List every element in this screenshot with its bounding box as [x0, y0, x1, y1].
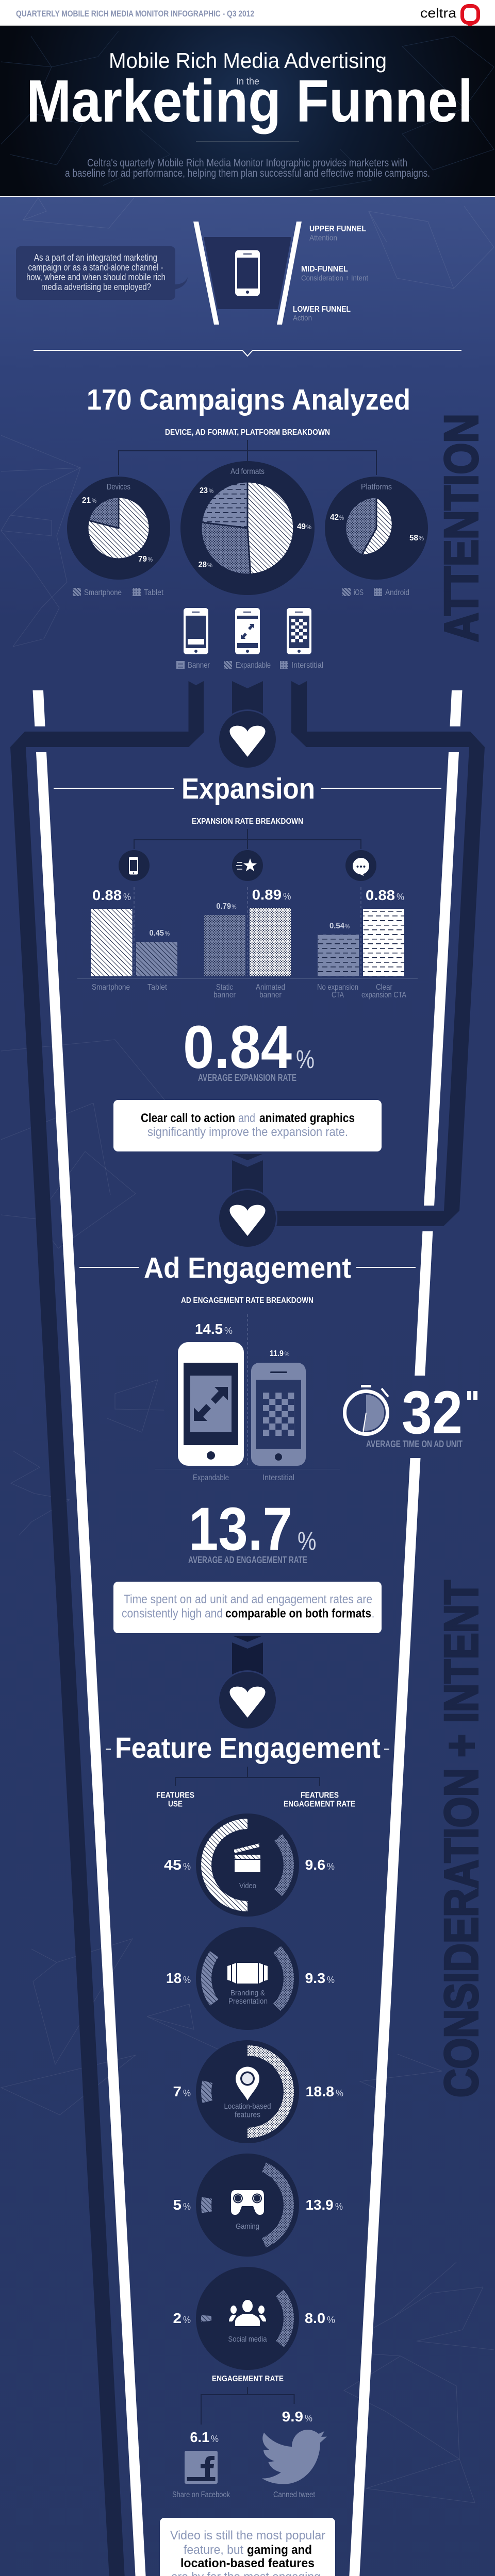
pie chart: ad formats: 28 [198, 561, 207, 569]
pie chart: ad formats: 23 [200, 486, 208, 495]
arrow: to ad engagement [232, 1154, 263, 1193]
callout: ad engagement takeaway [113, 1582, 382, 1633]
feature: branding and presentation: 18 [166, 1970, 182, 1986]
callout: intro question [16, 246, 188, 300]
callout: intro question: media advertising be employed? [41, 282, 151, 292]
feature: video [164, 1814, 335, 1917]
legend: ad formats: Expandable [236, 661, 271, 670]
stat: average ad engagement rate: AVERAGE AD ENGAGEMENT RATE [188, 1555, 307, 1565]
feature: social media [173, 2267, 335, 2370]
bar chart: expansion rate: % [345, 923, 350, 930]
icon: people [229, 2300, 266, 2326]
feature: location-based: % [183, 2088, 191, 2098]
connector lines [175, 1767, 320, 1786]
header bar: QUARTERLY MOBILE RICH MEDIA MONITOR INFOGRAPHIC - Q3 2012 [16, 9, 254, 19]
feature: gaming: Gaming [236, 2222, 259, 2231]
callout: feature takeaway: gaming and [247, 2543, 312, 2557]
column headers [156, 1791, 355, 1808]
feature: video: % [327, 1861, 335, 1872]
funnel pipe: right [268, 681, 485, 1226]
callout: expansion takeaway [113, 1100, 382, 1151]
stat: average expansion rate: AVERAGE EXPANSION RATE [198, 1073, 296, 1083]
icon: heart 2 [219, 1189, 276, 1248]
canned tweet: Canned tweet [273, 2490, 315, 2499]
connector lines [134, 829, 361, 849]
bar chart: expansion rate: 0.88 [92, 887, 122, 903]
legend: ad formats: Banner [188, 661, 210, 670]
bar chart: expansion rate: 0.54 [329, 922, 344, 930]
callout: ad engagement takeaway: consistently high and [122, 1606, 223, 1621]
stat: average expansion rate: % [296, 1045, 315, 1074]
callout: ad engagement takeaway: Time spent on ad unit and ad engagement rates are [124, 1592, 372, 1606]
funnel stage labels [293, 225, 369, 323]
hero panel: In the [236, 76, 259, 87]
icon: device [119, 850, 150, 881]
canned tweet: 9.9 [282, 2409, 303, 2425]
feature: gaming: % [183, 2201, 191, 2212]
callout: intro question: campaign or as a stand-alone channel - [28, 262, 163, 273]
funnel stage labels: LOWER FUNNEL [293, 305, 351, 314]
callout: intro question: how, where and when should mobile rich [26, 272, 166, 282]
feature: social media: % [327, 2315, 335, 2325]
feature: video: Video [239, 1882, 256, 1890]
callout: feature takeaway: Video is still the most popular [170, 2529, 325, 2543]
bar chart: expansion rate: Clear [376, 983, 393, 992]
callout: expansion takeaway: Clear call to action [141, 1111, 235, 1125]
feature: social media: Social media [228, 2335, 267, 2344]
feature: video: % [183, 1861, 191, 1872]
feature: location-based: Location-based [224, 2102, 271, 2111]
hero panel: Celtra's quarterly Mobile Rich Media Monitor Infographic provides marketers with [87, 157, 407, 169]
feature: location-based: features [235, 2110, 260, 2120]
column headers: ENGAGEMENT RATE [284, 1800, 355, 1808]
pie chart: devices: Devices [107, 483, 130, 492]
bar chart: expansion rate: 0.89 [252, 887, 282, 903]
pie chart: devices: % [92, 497, 96, 504]
phone chart: ad engagement [155, 1314, 340, 1482]
column headers: FEATURES [301, 1791, 339, 1800]
feature: gaming: 5 [173, 2197, 182, 2213]
pie chart: ad formats: % [207, 562, 212, 569]
heading: feature engagement: Feature Engagement [115, 1732, 381, 1765]
icon: clapperboard [234, 1843, 260, 1872]
feature: social media: 8.0 [305, 2310, 325, 2326]
heading: ad engagement: Ad Engagement [144, 1251, 351, 1284]
bar chart: expansion rate: banner [213, 991, 236, 999]
pie chart: platforms: % [419, 535, 424, 542]
feature: gaming: % [335, 2201, 343, 2212]
icon: twitter bird [262, 2430, 327, 2484]
bar chart: expansion rate: % [283, 891, 291, 902]
pie chart: ad formats: 49 [297, 522, 306, 531]
stat: average ad engagement rate: % [298, 1527, 317, 1555]
pie chart: devices: 21 [82, 496, 91, 505]
bar chart: expansion rate: % [397, 892, 404, 902]
legend: platforms [342, 588, 409, 597]
icon: map pin [236, 2067, 259, 2100]
subheading: engagement rate: ENGAGEMENT RATE [212, 2375, 284, 2383]
connector lines [201, 2387, 294, 2425]
bar chart: expansion rate: % [123, 892, 131, 902]
icon: expandable phone [235, 608, 260, 654]
legend: platforms: iOS [354, 588, 364, 597]
bar chart: expansion rate: % [232, 903, 237, 910]
column headers: USE [168, 1800, 183, 1808]
subheading: breakdown: DEVICE, AD FORMAT, PLATFORM BREAKDOWN [165, 428, 330, 437]
stat: average expansion rate: 0.84 [183, 1013, 292, 1081]
share on facebook: % [211, 2434, 219, 2444]
funnel stage labels: MID-FUNNEL [301, 265, 348, 274]
callout: feature takeaway: feature, but [184, 2543, 243, 2557]
heading: expansion: Expansion [182, 772, 315, 805]
hero panel [0, 26, 495, 197]
icon: interstitial phone [287, 608, 311, 654]
funnel pipe: left [10, 681, 227, 2576]
feature: branding and presentation: Presentation [228, 1997, 268, 2006]
phone chart: ad engagement: % [285, 1350, 290, 1358]
phone chart: ad engagement: Expandable [193, 1473, 229, 1482]
icon: star [232, 850, 263, 881]
pie chart: ad formats: % [306, 523, 311, 531]
section divider [34, 350, 461, 356]
callout: expansion takeaway: and [238, 1111, 255, 1125]
bar chart: expansion rate: No expansion [317, 983, 358, 992]
icon: interstitial phone large [251, 1363, 306, 1466]
bar chart: expansion rate: banner [259, 991, 282, 999]
stat: average time on ad unit: 32 [402, 1379, 463, 1447]
feature: branding and presentation: Branding & [230, 1989, 265, 1997]
bar chart: expansion rate: 0.45 [150, 929, 164, 938]
feature: branding and presentation: % [327, 1975, 335, 1985]
phone chart: ad engagement: 11.9 [270, 1349, 284, 1358]
pie chart: ad formats: % [209, 487, 213, 495]
pie chart: devices: % [147, 556, 153, 563]
phone chart: ad engagement: Interstitial [262, 1473, 294, 1482]
heading: 170 campaigns: 170 Campaigns Analyzed [87, 383, 410, 416]
feature: social media: % [183, 2315, 191, 2325]
callout: ad engagement takeaway: . [372, 1606, 374, 1621]
canned tweet: % [305, 2413, 312, 2424]
stat: average ad engagement rate: 13.7 [189, 1495, 292, 1563]
funnel stage labels: Action [293, 314, 312, 323]
hero panel: Mobile Rich Media Advertising [109, 48, 387, 73]
pie chart: platforms: Platforms [361, 483, 392, 492]
bar chart: expansion rate: Tablet [147, 983, 167, 992]
funnel stage labels: UPPER FUNNEL [309, 225, 366, 233]
feature: location-based [173, 2040, 343, 2143]
pie chart: ad formats: Ad formats [230, 467, 265, 476]
vertical label: consideration + intent: CONSIDERATION + INTENT [435, 1580, 488, 2097]
feature: location-based: % [336, 2088, 343, 2098]
stat: average time on ad unit [344, 1379, 477, 1449]
funnel walls [33, 690, 462, 2576]
legend: ad formats [176, 661, 323, 670]
pie chart: platforms [325, 477, 428, 580]
icon: heart 3 [219, 1671, 276, 1729]
pie chart: platforms: 42 [330, 513, 339, 522]
feature: branding and presentation: % [183, 1975, 191, 1985]
icon: gallery [227, 1963, 268, 1984]
feature: location-based: 18.8 [306, 2083, 334, 2099]
vertical label: attention: ATTENTION [435, 414, 488, 642]
subheading: expansion breakdown: EXPANSION RATE BREAKDOWN [192, 817, 303, 826]
icon: banner phone [184, 608, 208, 654]
icon: expandable phone large [178, 1342, 244, 1466]
bar chart: expansion rate: % [165, 930, 170, 937]
column headers: FEATURES [156, 1791, 194, 1800]
pie chart: devices: 79 [138, 555, 147, 564]
share on facebook: 6.1 [190, 2429, 209, 2445]
icon: heart 1 [219, 710, 276, 769]
feature: gaming: 13.9 [306, 2197, 334, 2213]
pie chart: ad formats [180, 461, 315, 595]
bar chart: expansion rate: Animated [256, 983, 285, 992]
share on facebook: Share on Facebook [172, 2490, 230, 2499]
feature: location-based: 7 [173, 2083, 182, 2099]
feature: social media: 2 [173, 2310, 182, 2326]
stat: average time on ad unit: AVERAGE TIME ON AD UNIT [366, 1439, 463, 1449]
callout: ad engagement takeaway: comparable on both formats [225, 1606, 371, 1621]
feature: video: 45 [164, 1857, 182, 1873]
logo: celtra: celtra [420, 5, 457, 21]
callout: expansion takeaway: animated graphics [259, 1111, 355, 1125]
callout: intro question: As a part of an integrated marketing [34, 252, 157, 263]
legend: devices: Smartphone [84, 588, 122, 597]
header bar [0, 0, 495, 29]
connector lines [119, 440, 376, 475]
legend: devices: Tablet [144, 588, 163, 597]
funnel stage labels: Consideration + Intent [301, 274, 369, 282]
legend: platforms: Android [385, 588, 409, 597]
feature: gaming [173, 2154, 343, 2257]
bar chart: expansion rate: Static [216, 983, 233, 992]
icon: facebook [185, 2451, 218, 2484]
subheading: ad engagement breakdown: AD ENGAGEMENT RATE BREAKDOWN [181, 1296, 314, 1305]
pie chart: devices [67, 477, 170, 580]
pie chart: platforms: % [339, 514, 344, 521]
bar chart: expansion rate: Smartphone [92, 983, 130, 992]
bar chart: expansion rate [77, 887, 418, 999]
feature: branding and presentation [166, 1927, 335, 2030]
pie chart: platforms: 58 [409, 534, 418, 543]
callout: feature takeaway [160, 2518, 335, 2576]
callout: feature takeaway: location-based features [180, 2556, 315, 2570]
bar chart: expansion rate: expansion CTA [361, 991, 406, 999]
funnel stage labels: Attention [309, 234, 337, 242]
icon: stopwatch [344, 1385, 388, 1434]
funnel diagram [193, 222, 369, 325]
canned tweet [262, 2409, 327, 2499]
feature: video: 9.6 [305, 1857, 325, 1873]
callout: expansion takeaway: significantly improve the expansion rate. [147, 1125, 348, 1139]
icon: phone [235, 250, 260, 296]
share on facebook [172, 2429, 230, 2499]
logo: celtra [420, 5, 478, 29]
legend: ad formats: Interstitial [291, 661, 323, 670]
legend: devices [73, 588, 163, 597]
bar chart: expansion rate: CTA [332, 991, 344, 999]
phone chart: ad engagement: 14.5 [195, 1321, 223, 1337]
phone chart: ad engagement: % [224, 1326, 233, 1336]
feature: branding and presentation: 9.3 [305, 1970, 325, 1986]
bar chart: expansion rate: 0.88 [366, 887, 395, 903]
arrow: to expansion [232, 681, 263, 714]
icon: gamepad [231, 2190, 264, 2215]
arrow: to feature engagement [232, 1636, 263, 1674]
bar chart: expansion rate: 0.79 [216, 902, 231, 911]
icon: speech bubble [345, 850, 376, 881]
